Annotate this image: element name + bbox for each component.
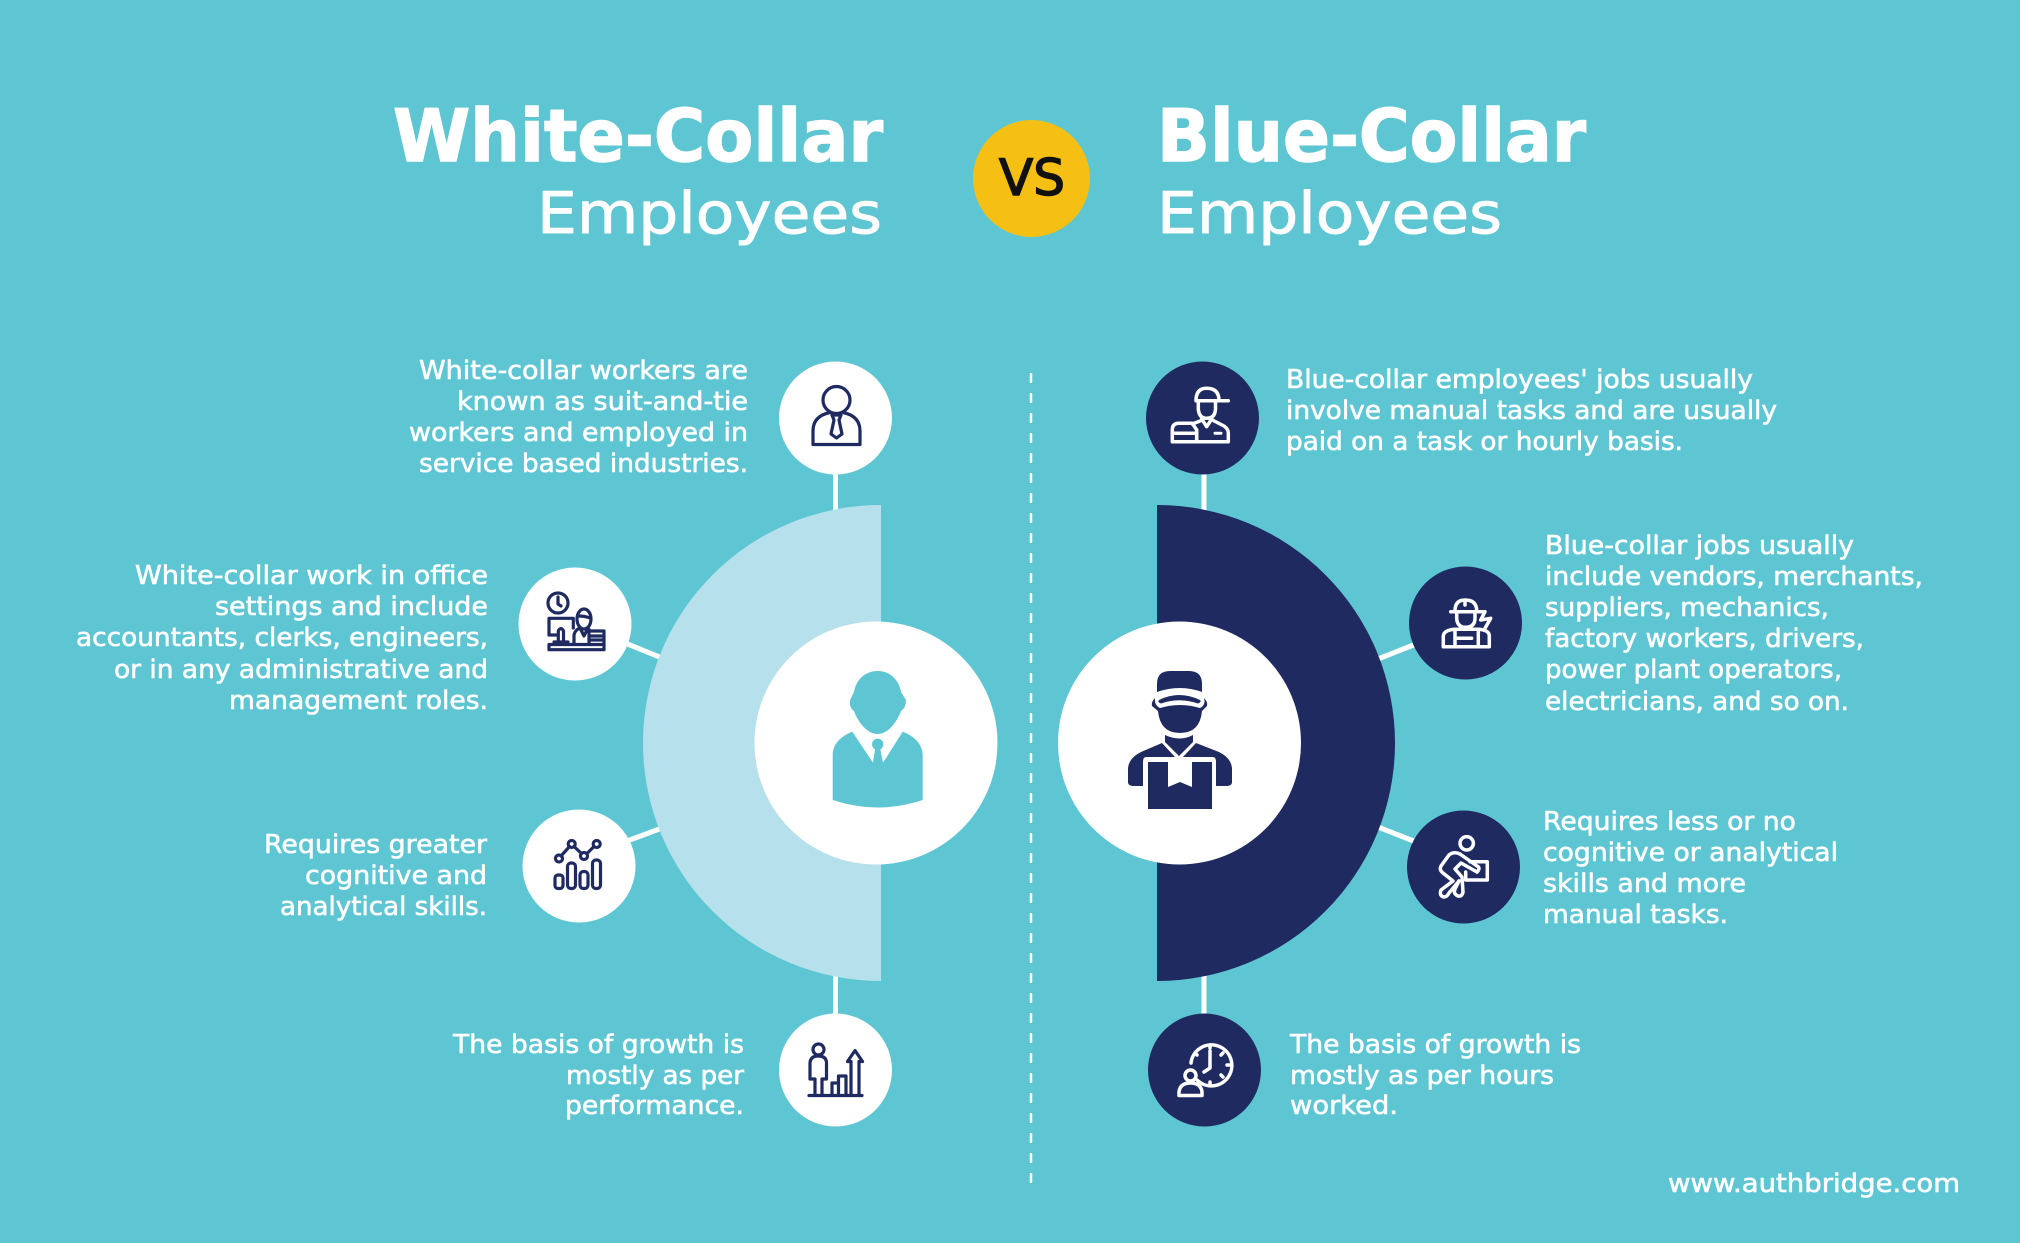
icon: white-collar worker in white circle (754, 622, 998, 864)
text: suit and tie: service based industries. (419, 449, 748, 479)
footer: website: www.authbridge.com (1668, 1169, 1960, 1199)
badge: VS: VS (999, 149, 1065, 207)
text: cognitive skills: cognitive and (305, 861, 487, 891)
title: Blue-Collar Employees: Employees (1157, 181, 1502, 247)
title: White-Collar Employees: White-Collar (393, 94, 883, 178)
item: white-collar performance growth (452, 1014, 892, 1126)
title: White-Collar Employees: Employees (537, 181, 882, 247)
title: Blue-Collar Employees (1157, 94, 1586, 247)
text: suit and tie: known as suit-and-tie (457, 387, 748, 417)
icon circle: delivery worker with box (1146, 362, 1259, 474)
item: blue-collar hours growth (1148, 1014, 1581, 1126)
text: suit and tie (409, 356, 748, 479)
text: hours growth: mostly as per hours (1290, 1061, 1554, 1091)
text: cognitive skills (264, 830, 487, 922)
center dashed divider (1030, 373, 1032, 1184)
item: blue-collar less cognitive (1407, 807, 1838, 930)
text: hours growth (1289, 1030, 1581, 1121)
text: job roles: power plant operators, (1545, 655, 1842, 685)
text: office settings: settings and include (215, 592, 488, 622)
text: cognitive skills: Requires greater (264, 830, 487, 860)
text: job roles: factory workers, drivers, (1545, 624, 1864, 654)
text: job roles (1545, 531, 1923, 717)
text: performance growth (452, 1030, 744, 1121)
text: cognitive skills: analytical skills. (280, 892, 487, 922)
icon circle: person with clock (1148, 1014, 1261, 1126)
text: performance growth: performance. (565, 1091, 744, 1121)
text: job roles: include vendors, merchants, (1545, 562, 1923, 592)
icon circle: suit and tie worker (779, 362, 892, 474)
text: suit and tie: White-collar workers are (419, 356, 748, 386)
item: white-collar office settings (76, 561, 632, 716)
text: office settings: White-collar work in office (135, 561, 488, 591)
badge: VS (973, 120, 1090, 237)
text: performance growth: The basis of growth is (452, 1030, 744, 1060)
text: less cognitive: Requires less or no (1543, 807, 1796, 837)
icon circle: electrician (1409, 566, 1522, 680)
text: hours growth: The basis of growth is (1289, 1030, 1581, 1060)
text: performance growth: mostly as per (566, 1061, 744, 1091)
icon circle: person lifting box (1407, 810, 1520, 924)
title: White-Collar Employees (393, 94, 883, 247)
icon: blue-collar worker in white circle (1058, 622, 1301, 864)
text: manual tasks: paid on a task or hourly basis. (1286, 427, 1683, 457)
item: blue-collar job roles (1409, 531, 1923, 717)
text: less cognitive (1543, 807, 1838, 930)
panel: blue-collar half disc with connectors (1157, 470, 1416, 1016)
text: job roles: Blue-collar jobs usually (1545, 531, 1854, 561)
text: office settings: management roles. (229, 686, 488, 716)
text: office settings (76, 561, 488, 716)
text: office settings: or in any administrative and (114, 655, 488, 685)
text: job roles: electricians, and so on. (1545, 687, 1849, 717)
icon circle: person and rising bars (779, 1014, 892, 1126)
text: manual tasks: involve manual tasks and are usually (1286, 396, 1777, 426)
item: white-collar suit and tie (409, 356, 892, 479)
text: job roles: suppliers, mechanics, (1545, 593, 1829, 623)
panel: white-collar half disc with connectors (625, 470, 881, 1016)
text: suit and tie: workers and employed in (409, 418, 748, 448)
icon circle: office worker at desk (518, 568, 632, 680)
title: Blue-Collar Employees: Blue-Collar (1157, 94, 1586, 178)
text: less cognitive: cognitive or analytical (1543, 838, 1838, 868)
text: hours growth: worked. (1290, 1091, 1398, 1121)
text: office settings: accountants, clerks, engineers, (76, 623, 488, 653)
icon circle: chart with trend line (522, 810, 636, 922)
text: manual tasks: Blue-collar employees' jobs usually (1286, 365, 1753, 395)
item: blue-collar manual tasks (1146, 362, 1777, 474)
text: less cognitive: skills and more (1543, 869, 1746, 899)
item: white-collar cognitive skills (264, 810, 636, 922)
text: less cognitive: manual tasks. (1543, 900, 1728, 930)
text: manual tasks (1286, 365, 1777, 457)
